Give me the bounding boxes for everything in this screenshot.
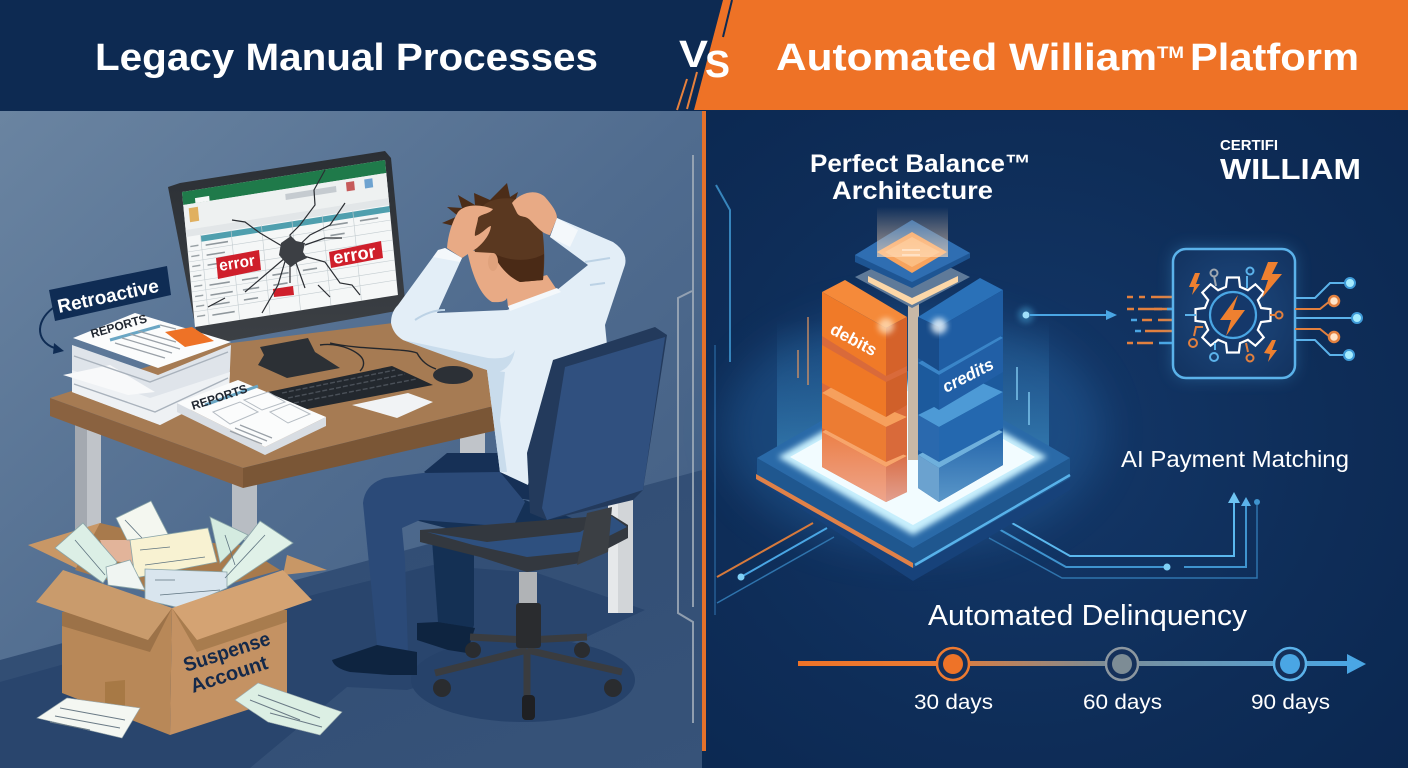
platform base xyxy=(756,368,1070,581)
delinquency timeline xyxy=(798,648,1366,714)
label: debits: debits xyxy=(827,320,880,360)
left heading: Legacy Manual Processes xyxy=(95,37,598,79)
report stack, small xyxy=(177,380,326,455)
error label: error xyxy=(218,253,256,275)
heading: perfect balance architecture: Perfect Balance™ xyxy=(810,150,1031,178)
milestone: 60 days xyxy=(1083,648,1162,714)
heading: automated delinquency: Automated Delinquency xyxy=(928,600,1248,632)
label: credits: credits xyxy=(939,355,997,397)
logo: certifi william xyxy=(1220,137,1361,186)
right heading xyxy=(776,37,1359,79)
tag: retroactive: Retroactive xyxy=(56,276,161,318)
versus mark xyxy=(679,34,730,86)
circuit traces xyxy=(717,492,1260,603)
milestone: 30 days: 30 days xyxy=(914,691,993,714)
arrow: tower to matching chip xyxy=(1018,307,1117,323)
box: suspense account xyxy=(28,501,342,738)
versus mark: V xyxy=(679,34,709,76)
desk xyxy=(50,312,633,613)
right heading: Platform xyxy=(1190,37,1359,79)
report stack xyxy=(63,311,231,425)
checks inside box xyxy=(55,501,293,608)
legs xyxy=(332,453,590,675)
milestone: 90 days: 90 days xyxy=(1251,691,1330,714)
crack xyxy=(208,170,360,313)
header band xyxy=(0,0,1408,111)
error label xyxy=(216,250,261,279)
heading: perfect balance architecture: Architecture xyxy=(832,177,993,205)
heading: perfect balance architecture xyxy=(810,150,1031,205)
icon: AI payment matching chip xyxy=(1127,248,1362,378)
balance tower on platform xyxy=(717,207,1260,603)
milestone: 60 days: 60 days xyxy=(1083,691,1162,714)
report stack, small: REPORTS xyxy=(190,382,249,413)
label: AI payment matching: AI Payment Matching xyxy=(1121,446,1349,472)
monitor with cracked spreadsheet xyxy=(168,151,405,378)
blue credit column xyxy=(918,278,1003,502)
logo: certifi william: WILLIAM xyxy=(1220,154,1361,186)
panel: legacy manual processes xyxy=(0,111,702,768)
panel: automated william platform xyxy=(702,111,1408,768)
tag: retroactive xyxy=(40,266,171,354)
worker head in hands xyxy=(332,183,626,675)
milestone: 30 days xyxy=(914,648,993,714)
versus mark: S xyxy=(705,44,730,86)
keyboard and mouse xyxy=(268,343,473,418)
right heading: TM xyxy=(1157,43,1184,62)
box: suspense account: Suspense xyxy=(181,628,273,677)
arrow: retroactive to reports xyxy=(40,308,64,354)
loose check, right xyxy=(235,683,342,735)
top cap xyxy=(855,207,970,308)
logo: certifi william: CERTIFI xyxy=(1220,137,1278,154)
loose check, left xyxy=(37,698,140,738)
milestone: 90 days xyxy=(1251,648,1330,714)
report stack: REPORTS xyxy=(89,311,149,341)
orange debit column xyxy=(822,280,907,502)
error label: error xyxy=(331,241,377,268)
office chair xyxy=(420,327,667,720)
right heading: Automated William xyxy=(776,37,1157,79)
box: suspense account: Account xyxy=(188,652,271,698)
